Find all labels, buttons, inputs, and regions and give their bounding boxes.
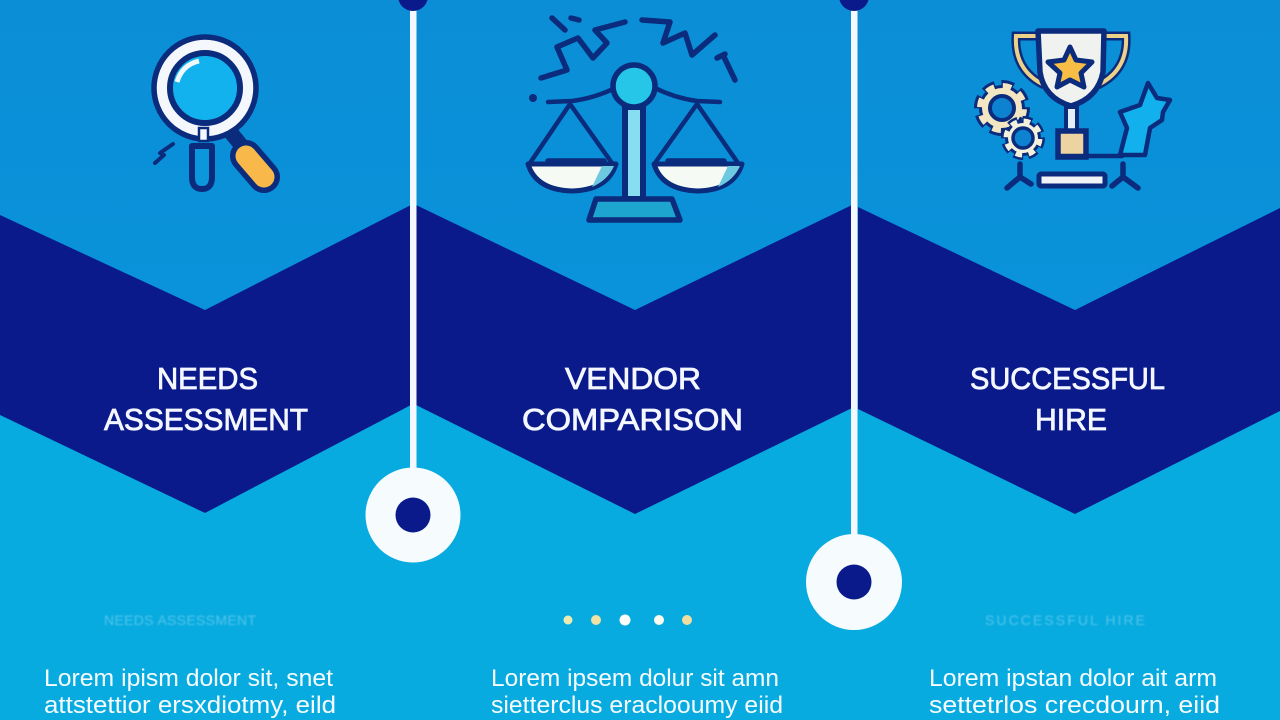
heading: needs assessment: ASSESSMENT [104, 402, 308, 437]
heading: vendor comparison: COMPARISON [522, 402, 743, 437]
body text 3: settetrlos crecdourn, eiid [929, 692, 1220, 719]
heading: needs assessment: NEEDS [157, 361, 258, 396]
body text 1: Lorem ipism dolor sit, snet [44, 665, 333, 692]
body text 2: sietterclus eraclooumy eiid [491, 692, 783, 719]
heading: successful hire: HIRE [1035, 402, 1107, 437]
body text 2: Lorem ipsem dolur sit amn [491, 665, 779, 692]
heading: vendor comparison: VENDOR [565, 361, 701, 396]
panel: vendor comparison chevron [416, 205, 852, 514]
timeline node 1 [366, 468, 460, 562]
sub-icon: small gear [1005, 120, 1041, 156]
heading: successful hire: SUCCESSFUL [970, 361, 1165, 396]
body text 3: Lorem ipstan dolor ait arm [929, 665, 1217, 692]
pagination dots [564, 614, 692, 626]
panel: needs assessment chevron [0, 205, 411, 513]
faint caption 3: SUCCESSFUL HIRE [985, 612, 1145, 628]
background: lower cyan [0, 320, 1280, 720]
icon: balance scales [528, 18, 742, 220]
timeline node 2 [806, 534, 902, 630]
background: upper blue [0, 0, 1280, 320]
sub-icon: large gear [979, 85, 1025, 131]
timeline connector 1 [398, 0, 428, 480]
timeline connector 2 [839, 0, 869, 550]
panel: successful hire chevron [858, 207, 1280, 514]
icon: magnifying glass [154, 37, 264, 189]
sub-icon: thumbs up [1120, 83, 1170, 155]
faint caption 1: NEEDS ASSESSMENT [104, 612, 256, 628]
body text 1: attstettior ersxdiotmy, eild [44, 692, 336, 719]
icon: trophy with gears and thumbs up [979, 31, 1170, 188]
